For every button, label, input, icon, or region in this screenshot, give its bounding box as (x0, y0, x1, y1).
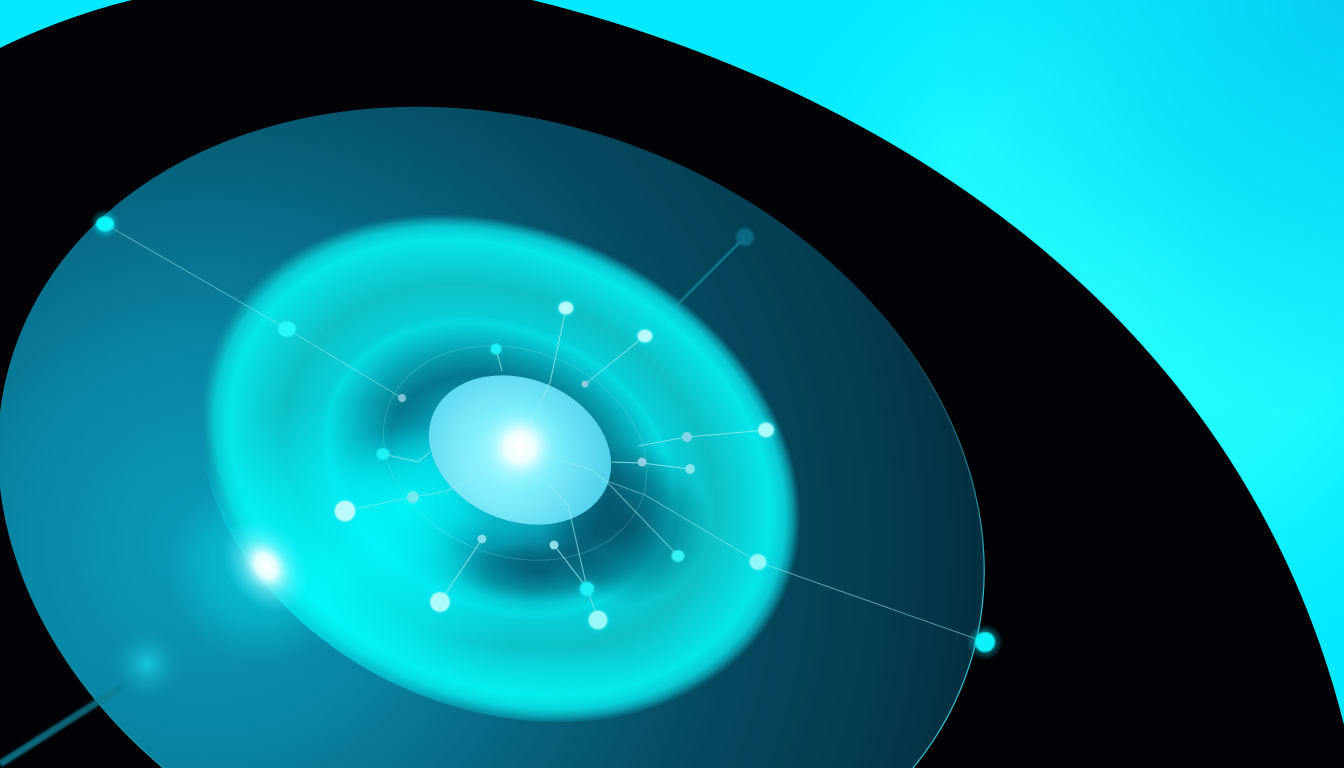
line: far right node through core (607, 481, 985, 642)
hot spot halo on disc (167, 475, 357, 665)
node: right inner 2 (638, 458, 646, 466)
node: right lower outer (745, 549, 771, 575)
faint outer node: upper right with beam (650, 228, 754, 332)
line: bottom-left node (440, 539, 482, 602)
thin orbit around core (353, 310, 677, 596)
line: top node (496, 349, 502, 371)
node: upper right (633, 324, 657, 348)
central core ellipse (406, 349, 634, 551)
node: top inner (490, 344, 502, 354)
network connector lines (105, 224, 985, 642)
node: lower small (550, 540, 558, 550)
node: inner upper-left (398, 394, 406, 402)
node: bottom left (425, 587, 455, 617)
faint outer node: lower left with beam (0, 626, 185, 764)
line: mid-left node (383, 452, 430, 462)
node: bottom (583, 605, 613, 635)
core burst (462, 389, 578, 505)
node: mid-left (376, 448, 390, 460)
node: upper right inner (582, 380, 588, 388)
concentric teal rings (204, 215, 800, 722)
node: upper-left mid (278, 321, 296, 337)
node: left outer (329, 495, 361, 527)
bottom dark shade (455, 542, 625, 602)
node: right inner 1 (682, 432, 692, 442)
line: core to lower-right node (545, 455, 678, 556)
node: top centre (554, 296, 578, 320)
line: upper-right node (585, 336, 645, 384)
node: far upper-left (90, 209, 120, 239)
node: right outer 2 (685, 464, 695, 474)
lower-left ring brightening (206, 417, 659, 722)
line: far upper-left node to inner node (105, 224, 402, 398)
left hot spot on ring edge (205, 502, 327, 630)
node: lower pair top (576, 578, 598, 600)
network nodes (90, 209, 1003, 660)
node: far right on rim (967, 624, 1003, 660)
line: core to bottom node (540, 475, 598, 620)
node: right outer 1 (753, 417, 779, 443)
node: lower right (672, 550, 684, 562)
line: left node through core (345, 465, 495, 511)
line: right node 2 (612, 462, 690, 469)
node: left inner (407, 491, 419, 503)
line: right node 1 (638, 430, 766, 446)
node: lower-left small (478, 534, 486, 544)
lower-right dark shade (540, 445, 710, 605)
line: lower node pair (554, 545, 587, 588)
line: top-centre node to core (527, 308, 566, 430)
